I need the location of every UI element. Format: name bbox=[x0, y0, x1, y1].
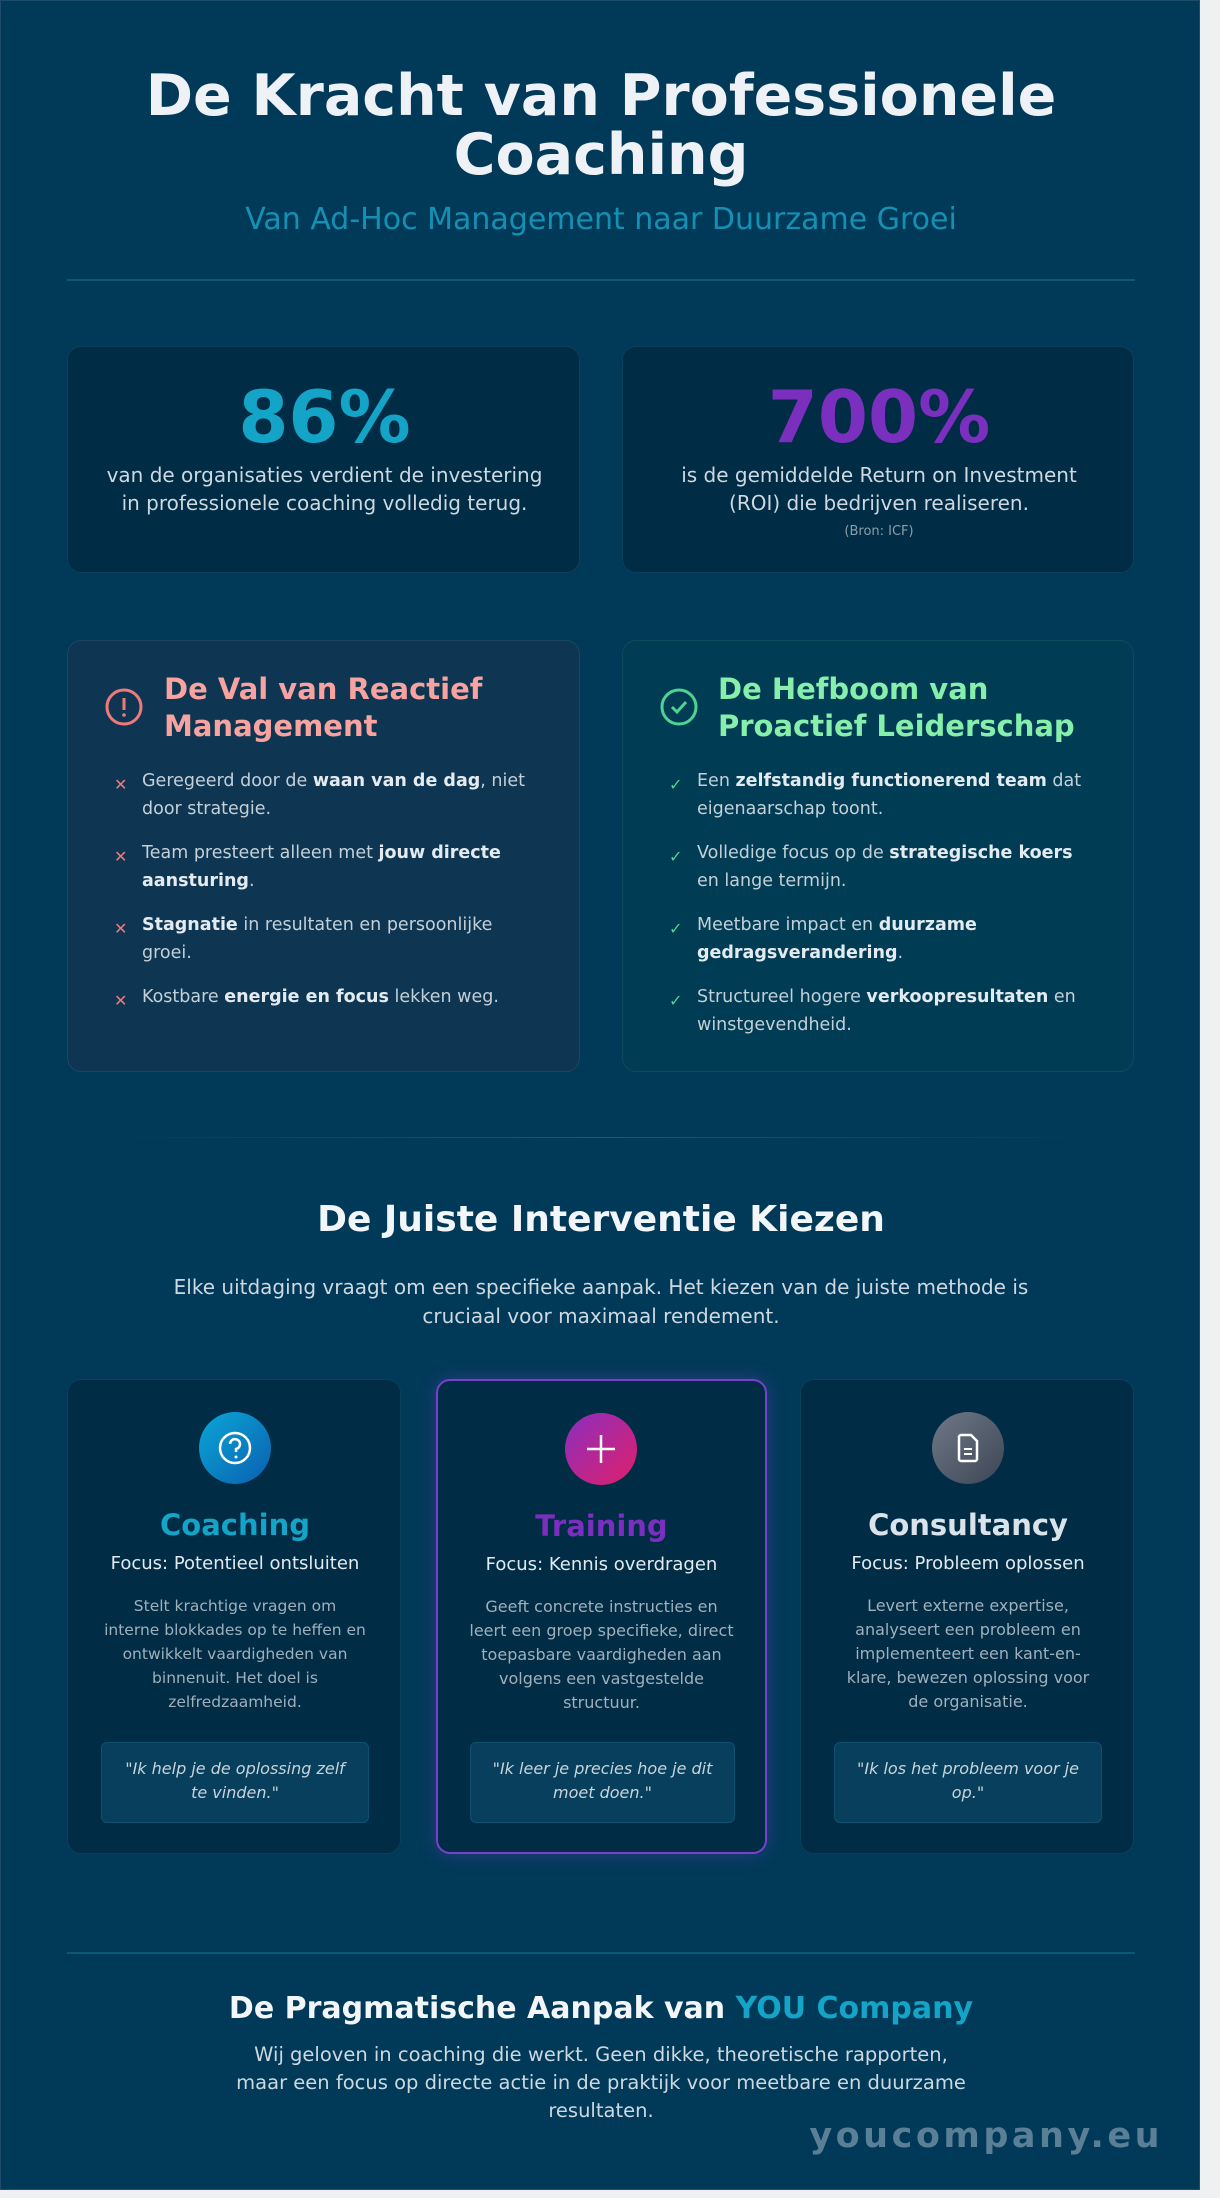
description: Stelt krachtige vragen om interne blokkades op te heffen en ontwikkelt vaardigheden van binnenuit. Het doel is zelfredzaamheid. bbox=[104, 1597, 366, 1711]
stat card: 86% bbox=[67, 346, 580, 573]
section heading: De Juiste Interventie Kiezen bbox=[317, 1199, 885, 1240]
heading: De Hefboom van bbox=[718, 672, 988, 706]
focus: Focus: Probleem oplossen bbox=[851, 1553, 1085, 1574]
list: ✓ bbox=[669, 991, 682, 1010]
icon: question bbox=[199, 1412, 271, 1484]
quote: "Ik help je de oplossing zelf te vinden." bbox=[125, 1759, 345, 1802]
list: Stagnatie in resultaten en persoonlijke groei. bbox=[142, 915, 492, 963]
list: ✕ bbox=[114, 847, 127, 866]
subtitle: Van Ad-Hoc Management naar Duurzame Groei bbox=[245, 202, 957, 237]
footer text: Wij geloven in coaching die werkt. Geen dikke, theoretische rapporten, maar een focus op directe actie in de praktijk voor meetbare en duurzame resultaten. bbox=[236, 2043, 966, 2122]
card: training bbox=[436, 1379, 767, 1854]
focus: Focus: Potentieel ontsluiten bbox=[111, 1553, 359, 1574]
panel: reactief management bbox=[67, 640, 580, 1072]
title: Coaching bbox=[454, 122, 748, 188]
title: De Kracht van Professionele bbox=[146, 63, 1056, 129]
stat text: (ROI) die bedrijven realiseren. bbox=[729, 491, 1029, 515]
icon: check bbox=[660, 688, 698, 726]
heading bbox=[164, 672, 483, 743]
title: Coaching bbox=[160, 1508, 310, 1542]
list: ✓ bbox=[669, 847, 682, 866]
title bbox=[146, 63, 1056, 188]
list: ✓ bbox=[669, 775, 682, 794]
section intro: Elke uitdaging vraagt om een specifieke aanpak. Het kiezen van de juiste methode is cruciaal voor maximaal rendement. bbox=[174, 1275, 1028, 1328]
title: Consultancy bbox=[868, 1508, 1068, 1542]
heading bbox=[718, 672, 1075, 743]
list: Volledige focus op de strategische koers en lange termijn. bbox=[697, 843, 1073, 891]
description: Levert externe expertise, analyseert een probleem en implementeert een kant-en-klare, bewezen oplossing voor de organisatie. bbox=[847, 1596, 1089, 1711]
footer heading: De Pragmatische Aanpak van YOU Company bbox=[229, 1991, 973, 2026]
list bbox=[669, 771, 1081, 1035]
icon: plus bbox=[565, 1413, 637, 1485]
title: Training bbox=[535, 1509, 668, 1543]
quote: "Ik leer je precies hoe je dit moet doen." bbox=[493, 1759, 712, 1802]
list: ✕ bbox=[114, 919, 127, 938]
stat text: in professionele coaching volledig terug. bbox=[122, 491, 527, 515]
card: consultancy bbox=[800, 1379, 1134, 1854]
focus: Focus: Kennis overdragen bbox=[486, 1554, 717, 1575]
stat text: is de gemiddelde Return on Investment bbox=[681, 463, 1077, 487]
source: (Bron: ICF) bbox=[844, 524, 914, 539]
list: ✕ bbox=[114, 991, 127, 1010]
list: Een zelfstandig functionerend team dat eigenaarschap toont. bbox=[697, 771, 1081, 819]
list: Kostbare energie en focus lekken weg. bbox=[142, 987, 499, 1007]
quote bbox=[470, 1742, 735, 1823]
list: Geregeerd door de waan van de dag, niet door strategie. bbox=[142, 771, 525, 819]
stat card: 700% bbox=[622, 346, 1134, 573]
list: ✕ bbox=[114, 775, 127, 794]
icon: warning bbox=[106, 688, 142, 726]
quote bbox=[834, 1742, 1102, 1823]
list: ✓ bbox=[669, 919, 682, 938]
stat text bbox=[107, 463, 542, 515]
icon: document bbox=[932, 1412, 1004, 1484]
heading: Proactief Leiderschap bbox=[718, 709, 1075, 743]
list: Team presteert alleen met jouw directe aansturing. bbox=[142, 843, 501, 891]
description: Geeft concrete instructies en leert een groep specifieke, direct toepasbare vaardigheden aan volgens een vastgestelde structuur. bbox=[469, 1597, 734, 1712]
quote: "Ik los het probleem voor je op." bbox=[857, 1759, 1079, 1802]
stat number: 700% bbox=[768, 375, 990, 459]
quote bbox=[101, 1742, 369, 1823]
card: coaching bbox=[67, 1379, 401, 1854]
heading: Management bbox=[164, 709, 377, 743]
watermark: youcompany.eu bbox=[809, 2116, 1163, 2156]
list: Structureel hogere verkoopresultaten en winstgevendheid. bbox=[697, 987, 1076, 1035]
list bbox=[114, 771, 525, 1010]
stat text: van de organisaties verdient de investering bbox=[107, 463, 542, 487]
heading: De Val van Reactief bbox=[164, 672, 482, 706]
panel: proactief leiderschap bbox=[622, 640, 1134, 1072]
list: Meetbare impact en duurzame gedragsverandering. bbox=[697, 915, 977, 963]
stat number: 86% bbox=[238, 375, 411, 459]
stat text bbox=[681, 463, 1077, 515]
